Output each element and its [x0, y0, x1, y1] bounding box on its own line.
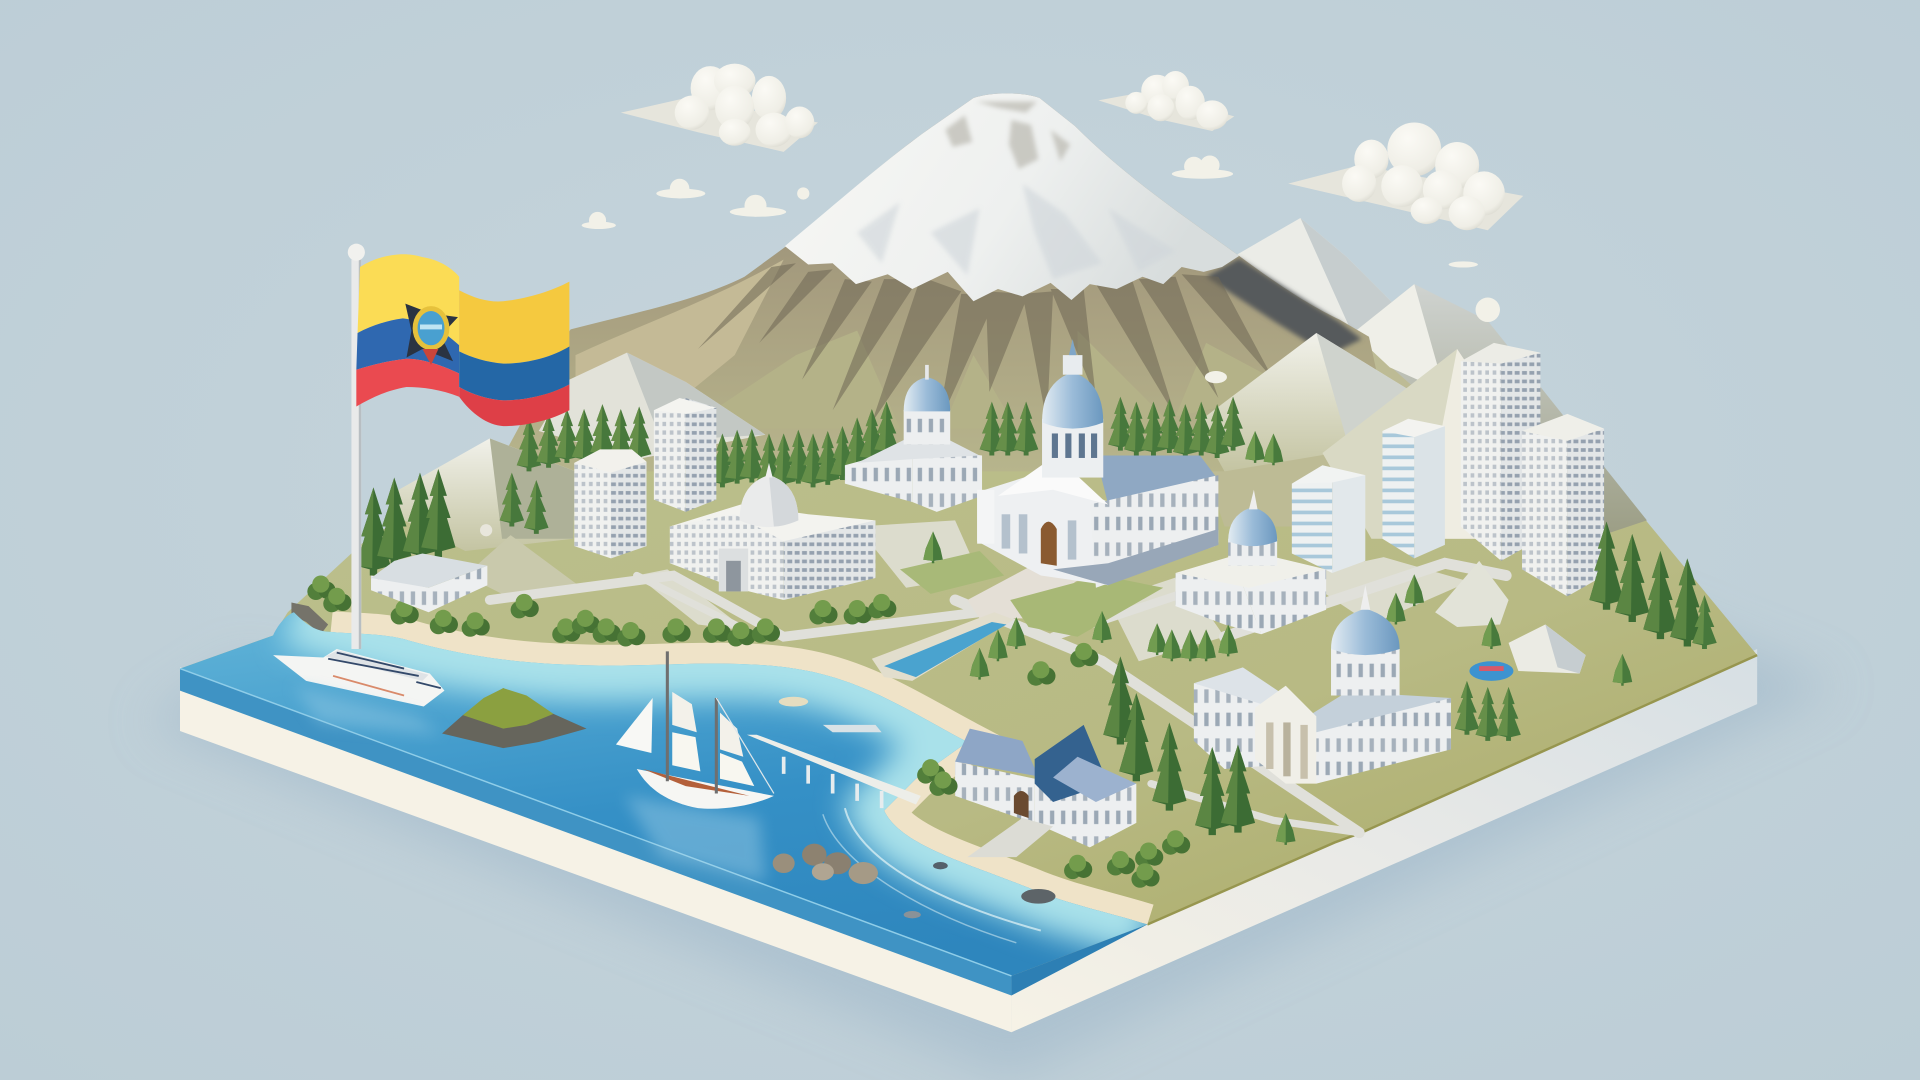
forest right edge [1589, 522, 1717, 649]
sea [180, 612, 1147, 996]
volcano lower olive slopes [686, 331, 1298, 429]
palace rear roof [1096, 456, 1218, 504]
volcano body [508, 93, 1384, 471]
flag left blue [356, 318, 459, 373]
volcano dark right band [1206, 258, 1362, 355]
flag right red [459, 384, 569, 426]
platform base [180, 649, 1757, 1032]
cloud large left [621, 64, 818, 152]
flag pole [348, 244, 365, 649]
plaza lawn and stairs [900, 551, 1163, 637]
mid right peak [1198, 333, 1408, 471]
platform shadow [147, 588, 1837, 1078]
forest back left [517, 402, 899, 487]
forest centre [923, 531, 1632, 741]
small clouds [582, 156, 1500, 383]
volcano ridges [698, 263, 1273, 429]
flag right yellow [459, 282, 569, 364]
capitol lower right [1194, 585, 1451, 784]
forest back centre right [980, 397, 1283, 465]
road network [490, 539, 1506, 833]
palace right facade [1090, 475, 1218, 588]
shallow water glow [294, 612, 1147, 943]
palace drum [1042, 419, 1103, 478]
paved plazas [637, 520, 1469, 661]
peak right [1353, 284, 1647, 539]
tall pines lower [1103, 656, 1296, 845]
platform front-left side [180, 667, 1011, 1032]
central palace [977, 339, 1218, 588]
island [442, 688, 587, 748]
bushes row [307, 576, 896, 647]
palace door [1041, 522, 1057, 566]
house by the beach [955, 725, 1136, 857]
left peak back [539, 353, 765, 459]
tall right peak [1322, 349, 1518, 539]
left peak front [394, 438, 576, 551]
cloud large right [1288, 122, 1523, 230]
boats and rocks [773, 697, 1056, 918]
mountains rear right [1206, 218, 1647, 539]
forest left [356, 469, 549, 576]
monument and pavilion [1435, 561, 1586, 681]
ship hull [273, 649, 444, 707]
sailboat reflection [624, 796, 765, 882]
far peak [1237, 218, 1411, 367]
palace pediment [998, 456, 1108, 504]
cruise ship [273, 649, 444, 707]
tower slim blue [1382, 419, 1445, 558]
tower mid blue [1292, 465, 1365, 573]
main volcano [508, 93, 1384, 471]
tower left [654, 398, 716, 512]
coastal rocks [291, 602, 328, 634]
ship upper decks [326, 650, 429, 681]
ridge fill behind peaks [1206, 343, 1506, 527]
tower left front [574, 449, 647, 558]
volcano left flank light [576, 260, 784, 429]
sailboat [616, 651, 774, 809]
Ecuador flag [356, 254, 569, 426]
sea edge [180, 669, 1011, 996]
small knoll [465, 535, 582, 600]
beach sand [331, 632, 1147, 924]
capitol left [670, 463, 876, 600]
flag coat of arms [405, 304, 458, 365]
summit rocks [945, 102, 1070, 169]
pier [747, 735, 921, 808]
palace dome [1042, 372, 1103, 429]
palace left facade [977, 471, 1108, 585]
capitol right [1176, 490, 1326, 634]
land surface [180, 416, 1757, 976]
cloud middle [1098, 71, 1234, 131]
canal [872, 612, 1014, 681]
flag left yellow [358, 254, 459, 345]
ship reflection [294, 686, 441, 735]
platform front-right side [1011, 649, 1757, 1032]
land edge lip [1147, 655, 1757, 924]
flag right blue [459, 347, 569, 400]
tower right [1522, 414, 1604, 596]
palace left tower [977, 490, 994, 544]
mountains sides [394, 333, 1518, 600]
palms and shrubs [917, 759, 1190, 888]
tower tall [1461, 343, 1540, 561]
volcano snowcap [785, 93, 1239, 301]
snow shading [857, 184, 1176, 279]
flag left red [356, 359, 459, 407]
rear palace [845, 365, 982, 512]
lodge left [371, 553, 487, 612]
